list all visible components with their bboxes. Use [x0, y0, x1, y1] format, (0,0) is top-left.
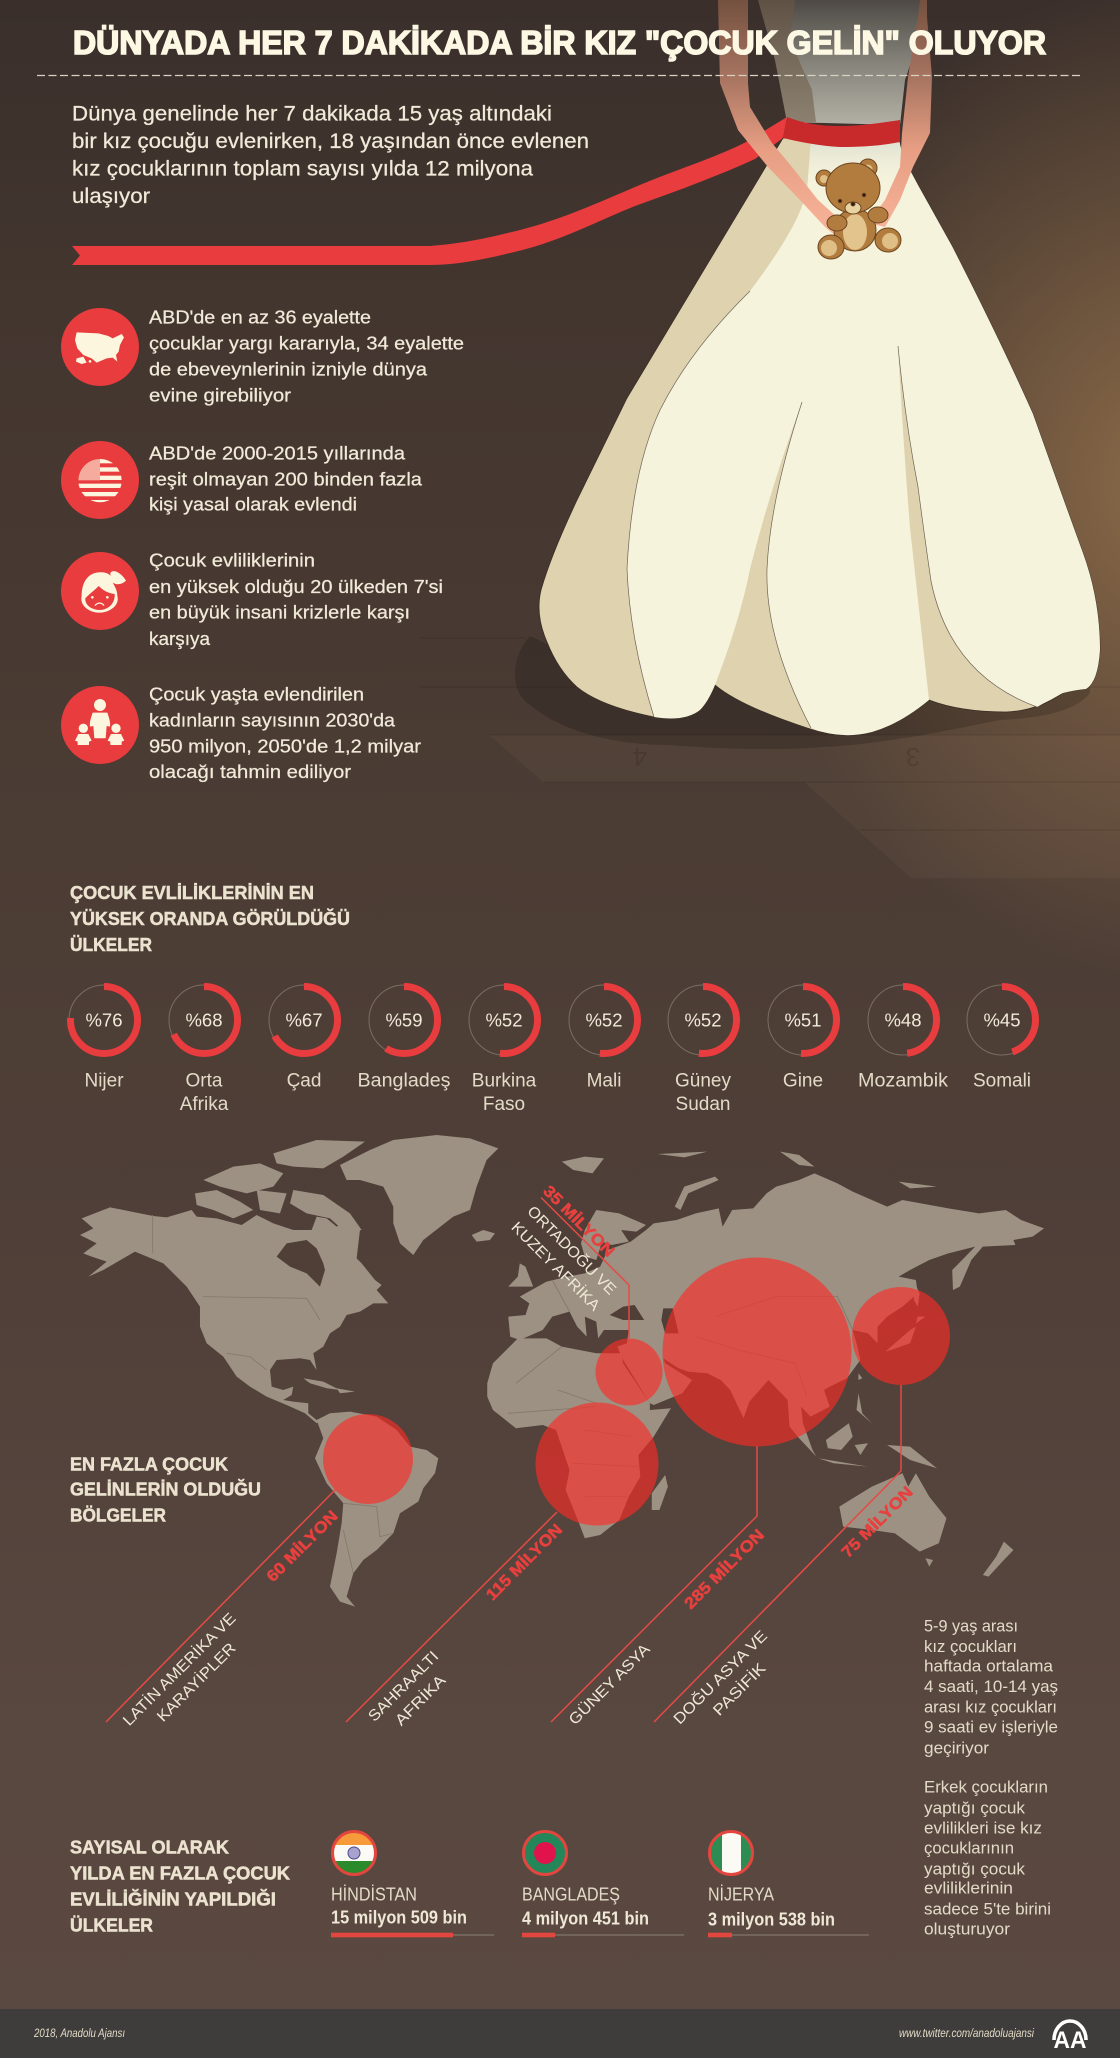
country: Nigeria: NİJERYA: [708, 1884, 774, 1904]
callout: Middle East and North Africa: ORTADOĞU VE: [524, 1203, 619, 1298]
floor with hopscotch slabs: 3: [906, 742, 920, 772]
dress shadow: [515, 636, 1090, 749]
side note: boys' child marriage: [924, 1778, 1051, 1938]
fact: US minors married: [61, 441, 423, 519]
country: India: [330, 1830, 494, 1937]
callout: Sub-Saharan Africa: [346, 1512, 566, 1729]
donut: Burkina Faso: %52: [485, 1010, 523, 1030]
heading: regions: [70, 1454, 261, 1526]
country: Nigeria: [705, 1830, 869, 1937]
donut: Orta Afrika: Orta: [186, 1070, 223, 1092]
side note: boys' child marriage: yaptığı çocuk: [924, 1800, 1026, 1818]
donut: Mozambik: [858, 985, 949, 1092]
text: projections: Çocuk yaşta evlendirilen: [149, 684, 364, 704]
bubble: Middle East and North Africa: [596, 1338, 662, 1406]
red belt: [783, 117, 900, 147]
fact: projections: [61, 684, 421, 782]
text: projections: [149, 684, 421, 782]
icon: Nigeria flag: [708, 1830, 754, 1876]
text: US minors married: [149, 442, 423, 514]
donut charts: country percentages: [69, 985, 1037, 1115]
side note: boys' child marriage: evlilikleri ise kız: [924, 1820, 1042, 1838]
text: US states: evine girebiliyor: [149, 384, 291, 406]
donut: Güney Sudan: Sudan: [676, 1094, 730, 1115]
donut: Çad: [269, 985, 339, 1092]
callout: Middle East and North Africa: [508, 1182, 629, 1338]
side note: boys' child marriage: evliliklerinin: [924, 1880, 1013, 1898]
callout: Middle East and North Africa: KUZEY AFRİKA: [508, 1218, 604, 1315]
side note: housework hours: [924, 1618, 1058, 1758]
bubble: Sub-Saharan Africa: [536, 1402, 658, 1526]
country: Bangladesh: [522, 1832, 684, 1937]
callout: East Asia and Pacific: PASİFİK: [709, 1659, 770, 1719]
callout: Sub-Saharan Africa: 115 MİLYON: [483, 1521, 566, 1604]
icon: girl face: [61, 552, 139, 630]
country: India: HİNDİSTAN: [331, 1884, 417, 1904]
intro paragraph: [72, 102, 589, 208]
side note: boys' child marriage: Erkek çocukların: [924, 1778, 1048, 1796]
donut: Çad: Çad: [287, 1070, 321, 1092]
side note: housework hours: geçiriyor: [924, 1740, 990, 1758]
text: US minors married: reşit olmayan 200 binden fazla: [149, 468, 423, 490]
country: India: 15 milyon 509 bin: [331, 1908, 467, 1928]
callout: Sub-Saharan Africa: AFRİKA: [391, 1671, 450, 1729]
heading: highest-rate countries: ÇOCUK EVLİLİKLERİNİN EN: [70, 882, 314, 903]
text: projections: 950 milyon, 2050'de 1,2 milyar: [149, 736, 421, 756]
left arm: [718, 0, 848, 237]
text: projections: kadınların sayısının 2030'da: [149, 710, 396, 730]
text: US minors married: kişi yasal olarak evlendi: [149, 494, 357, 514]
side note: housework hours: kız çocukları: [924, 1638, 1017, 1656]
donut: Güney Sudan: [668, 985, 738, 1115]
donut: Gine: %51: [784, 1010, 822, 1030]
text: US states: çocuklar yargı kararıyla, 34 eyalette: [149, 332, 464, 354]
side note: housework hours: arası kız çocukları: [924, 1698, 1057, 1716]
text: US minors married: ABD'de 2000-2015 yıllarında: [149, 442, 406, 464]
intro paragraph: kız çocuklarının toplam sayısı yılda 12 milyona: [72, 158, 533, 180]
callout: South Asia: GÜNEY ASYA: [565, 1640, 654, 1729]
callout: East Asia and Pacific: 75 MİLYON: [838, 1483, 917, 1562]
text: humanitarian crises: [149, 550, 443, 649]
donut: Bangladeş: [358, 985, 450, 1092]
country: Bangladesh: BANGLADEŞ: [522, 1884, 620, 1904]
donut: Nijer: Nijer: [84, 1070, 124, 1092]
text: humanitarian crises: karşıya: [149, 628, 211, 649]
country: Nigeria: 3 milyon 538 bin: [708, 1910, 835, 1930]
side note: boys' child marriage: çocuklarının: [924, 1840, 1014, 1858]
donut: Burkina Faso: Burkina: [472, 1070, 537, 1092]
dress front light panel: [627, 140, 1100, 735]
icon: USA map: [61, 308, 139, 386]
floor with hopscotch slabs: [420, 638, 1120, 878]
teddy bear: [816, 159, 901, 259]
donut: Gine: [768, 985, 838, 1092]
donut: Bangladeş: %59: [385, 1010, 423, 1030]
world map: [80, 1135, 1044, 1607]
donut: Burkina Faso: Faso: [483, 1094, 525, 1115]
dress fold lines: [627, 291, 1037, 728]
donut: Burkina Faso: [469, 985, 539, 1115]
fact: humanitarian crises: [61, 550, 443, 649]
donut: Gine: Gine: [783, 1070, 823, 1092]
icon: US flag: [61, 441, 139, 519]
text: US states: de ebeveynlerinin izniyle dünya: [149, 358, 428, 380]
callout: South Asia: [551, 1446, 768, 1729]
text: US states: [149, 306, 464, 406]
callout: East Asia and Pacific: DOĞU ASYA VE: [671, 1628, 771, 1728]
intro paragraph: ulaşıyor: [72, 185, 150, 208]
bride bodice: [758, 0, 927, 125]
text: humanitarian crises: Çocuk evliliklerinin: [149, 550, 315, 570]
donut: Bangladeş: Bangladeş: [358, 1070, 450, 1092]
icon: India flag: [330, 1830, 378, 1877]
heading: countries by number: ÜLKELER: [70, 1914, 153, 1936]
text: US states: ABD'de en az 36 eyalette: [149, 306, 371, 328]
text: humanitarian crises: en büyük insani krizlerle karşı: [149, 602, 410, 622]
donut: Mozambik: Mozambik: [858, 1070, 949, 1092]
donut: Somali: [967, 985, 1037, 1092]
red ribbon tail: [72, 117, 787, 265]
donut: Orta Afrika: [169, 985, 239, 1115]
map: Americas and Greenland: [80, 1135, 498, 1607]
footer bar: 2018, Anadolu Ajansı: [33, 2028, 125, 2040]
side note: housework hours: 5-9 yaş arası: [924, 1618, 1018, 1636]
text: projections: olacağı tahmin ediliyor: [149, 761, 351, 782]
heading: highest-rate countries: ÜLKELER: [70, 934, 152, 955]
side note: boys' child marriage: sadece 5'te birini: [924, 1900, 1051, 1918]
callout: South Asia: 285 MİLYON: [681, 1526, 768, 1613]
callout: Latin America: LATİN AMERİKA VE: [119, 1609, 239, 1729]
bubble: Latin America: [323, 1414, 413, 1504]
side note: housework hours: haftada ortalama: [924, 1658, 1054, 1676]
donut: Güney Sudan: Güney: [675, 1070, 731, 1092]
heading: regions: GELİNLERİN OLDUĞU: [70, 1478, 261, 1500]
title: DÜNYADA HER 7 DAKİKADA BİR KIZ "ÇOCUK GELİN" OLUYOR: [73, 24, 1046, 61]
icon: three figures: [61, 686, 139, 764]
heading: countries by number: EVLİLİĞİNİN YAPILDIĞI: [70, 1888, 276, 1910]
heading: regions: EN FAZLA ÇOCUK: [70, 1454, 229, 1474]
bubble: East Asia and Pacific: [852, 1287, 950, 1385]
text: humanitarian crises: en yüksek olduğu 20 ülkeden 7'si: [149, 576, 443, 597]
donut: Orta Afrika: Afrika: [180, 1094, 229, 1115]
dress back panel: [539, 138, 1100, 735]
donut: Güney Sudan: %52: [684, 1010, 722, 1030]
bubble: South Asia: [662, 1258, 852, 1446]
right arm: [868, 0, 932, 227]
map: Europe, Africa, Asia and Oceania: [487, 1152, 1044, 1577]
donut: Çad: %67: [285, 1010, 323, 1030]
heading: countries by number: YILDA EN FAZLA ÇOCUK: [70, 1862, 291, 1884]
heading: countries by number: [70, 1836, 291, 1936]
donut: Somali: %45: [983, 1010, 1021, 1030]
icon: AA logo: AA: [1054, 2027, 1086, 2054]
footer bar: www.twitter.com/anadoluajansi: [899, 2028, 1034, 2040]
donut: Mali: [569, 985, 639, 1092]
heading: highest-rate countries: [70, 882, 350, 955]
footer bar: [0, 2009, 1120, 2058]
callout: Latin America: [106, 1489, 342, 1729]
fact: US states: [61, 306, 464, 406]
heading: highest-rate countries: YÜKSEK ORANDA GÖRÜLDÜĞÜ: [70, 908, 350, 929]
donut: Nijer: %76: [85, 1010, 123, 1030]
donut: Mali: Mali: [587, 1070, 621, 1092]
callout: East Asia and Pacific: [654, 1385, 917, 1728]
callout: Middle East and North Africa: 35 MİLYON: [539, 1182, 618, 1261]
callout: Sub-Saharan Africa: SAHRAALTI: [365, 1648, 442, 1725]
callout: Latin America: KARAYİPLER: [153, 1639, 239, 1725]
heading: regions: BÖLGELER: [70, 1504, 166, 1526]
side note: housework hours: 9 saati ev işleriyle: [924, 1718, 1058, 1736]
donut: Somali: Somali: [973, 1070, 1031, 1092]
country: Bangladesh: 4 milyon 451 bin: [522, 1908, 649, 1928]
intro paragraph: Dünya genelinde her 7 dakikada 15 yaş altındaki: [72, 102, 552, 126]
side note: housework hours: 4 saati, 10-14 yaş: [924, 1678, 1058, 1696]
wedding dress: [539, 138, 1100, 735]
side note: boys' child marriage: oluşturuyor: [924, 1920, 1011, 1938]
side note: boys' child marriage: yaptığı çocuk: [924, 1860, 1026, 1878]
donut: Mali: %52: [585, 1010, 623, 1030]
callout: Latin America: 60 MİLYON: [263, 1507, 342, 1586]
heading: countries by number: SAYISAL OLARAK: [70, 1836, 230, 1858]
donut: Nijer: [69, 985, 139, 1092]
icon: Bangladesh flag: [524, 1832, 566, 1874]
intro paragraph: bir kız çocuğu evlenirken, 18 yaşından önce evlenen: [72, 130, 589, 153]
donut: Orta Afrika: %68: [185, 1010, 223, 1030]
donut: Mozambik: %48: [884, 1010, 922, 1030]
floor with hopscotch slabs: 4: [633, 742, 647, 772]
